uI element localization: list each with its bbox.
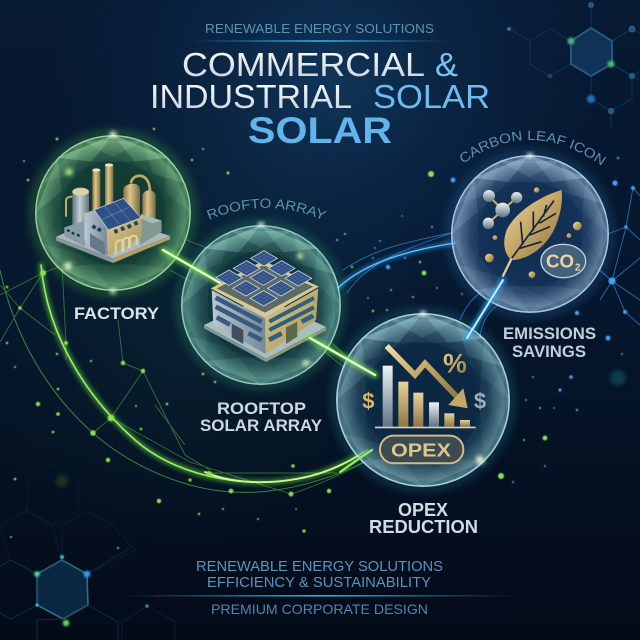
energy beam: rooftop to opex <box>310 338 375 472</box>
co2 badge: 2 <box>575 263 581 274</box>
label: rooftop solar array: SOLAR ARRAY <box>200 416 323 435</box>
co2 badge <box>541 244 586 278</box>
sphere: rooftop array <box>156 200 366 410</box>
label: emissions savings: SAVINGS <box>512 342 586 361</box>
title: & <box>435 46 458 83</box>
sphere: emissions <box>427 131 633 337</box>
curved caption: rooftop: ROOFTO ARRAY <box>206 198 327 220</box>
label: opex reduction: OPEX <box>398 500 448 520</box>
hexagon mesh: bottom left <box>0 465 175 640</box>
label: rooftop solar array: ROOFTOP <box>217 399 306 418</box>
molecule <box>483 190 522 229</box>
icon: rooftop building with solar panels <box>204 251 326 362</box>
main green arc <box>41 265 367 482</box>
faint glow orbs <box>56 370 626 487</box>
dollar signs: $ <box>362 388 374 413</box>
percent sign: % <box>443 349 467 379</box>
icon: carbon leaf <box>483 187 586 278</box>
title: SOLAR <box>373 78 490 115</box>
label: opex reduction <box>369 500 478 537</box>
label: emissions savings: EMISSIONS <box>503 324 596 343</box>
blue energy streams <box>338 243 455 288</box>
glowing nodes <box>6 128 635 549</box>
title: INDUSTRIAL <box>150 78 352 115</box>
footer text: RENEWABLE ENERGY SOLUTIONS <box>196 558 443 575</box>
label: opex reduction: REDUCTION <box>369 517 478 537</box>
green network lines <box>0 240 372 494</box>
sphere: opex <box>309 286 537 514</box>
dollar signs: $ <box>474 388 486 413</box>
bars <box>375 366 476 428</box>
opex pill: OPEX <box>391 440 452 461</box>
footer text: EFFICIENCY & SUSTAINABILITY <box>207 574 431 591</box>
energy beam: opex to emissions <box>467 280 503 338</box>
icon: factory building <box>56 163 170 263</box>
label: emissions savings <box>503 324 596 361</box>
title: COMMERCIAL <box>182 46 425 83</box>
hexagon mesh: top right <box>507 2 640 130</box>
sphere: factory <box>11 111 215 315</box>
footer text <box>120 558 520 617</box>
falling arrow <box>387 346 468 408</box>
leaf <box>503 190 562 277</box>
title: SOLAR <box>248 110 392 151</box>
energy beam: factory to rooftop <box>163 250 222 284</box>
label: factory: FACTORY <box>74 304 160 323</box>
label: rooftop solar array <box>200 399 323 435</box>
title <box>150 46 490 151</box>
carbon particles <box>485 187 582 278</box>
co2 badge: CO <box>546 251 574 272</box>
eyebrow: RENEWABLE ENERGY SOLUTIONS <box>205 21 434 36</box>
curved caption: carbon leaf: CARBON LEAF ICON <box>460 130 606 166</box>
rule under eyebrow <box>190 40 450 42</box>
dollar signs <box>362 388 486 413</box>
icon: opex chart <box>362 346 486 463</box>
blue network lines <box>343 188 640 337</box>
footer text: PREMIUM CORPORATE DESIGN <box>211 601 428 617</box>
